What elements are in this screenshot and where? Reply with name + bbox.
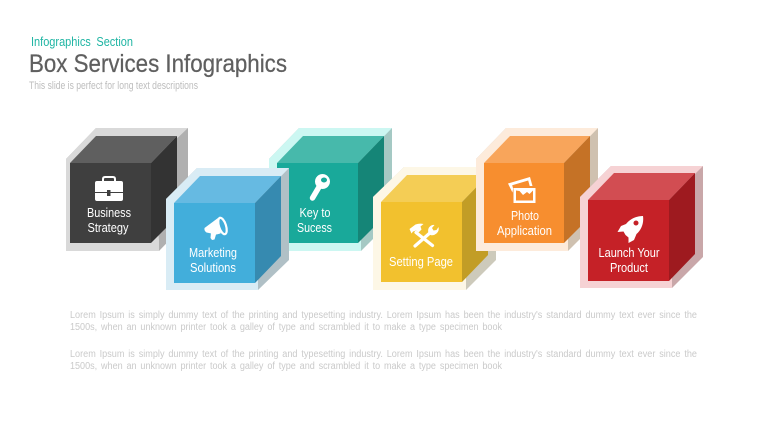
label: Key to Sucess xyxy=(297,205,332,235)
icon: photo xyxy=(508,177,536,203)
text block: first paragraph xyxy=(70,310,697,333)
label: Business Strategy xyxy=(87,205,131,235)
box: Marketing Solutions xyxy=(166,168,289,290)
label: Launch Your Product: Launch Your xyxy=(598,245,660,260)
label: Setting Page: Setting Page xyxy=(389,254,453,269)
label: Marketing Solutions: Solutions xyxy=(190,260,236,275)
label: Key to Sucess: Key to xyxy=(300,205,330,220)
label: Photo Application xyxy=(497,208,552,238)
text block: second paragraph: Lorem Ipsum is simply dummy text of the printing and typesetting industry. Lorem Ipsum has been the industry's standard dummy text ever since the xyxy=(70,349,697,360)
text block: second paragraph: 1500s, when an unknown printer took a galley of type and scrambled it to make a type specimen book xyxy=(70,361,503,372)
box: Business Strategy xyxy=(66,128,188,251)
label: Launch Your Product: Product xyxy=(610,260,648,275)
label: Photo Application: Application xyxy=(497,223,552,238)
icon: briefcase xyxy=(95,177,123,201)
section label: Infographics Section xyxy=(31,34,133,49)
box: Setting Page xyxy=(373,167,496,290)
icon: megaphone xyxy=(204,216,228,240)
icon: rocket xyxy=(618,216,643,243)
box: Launch Your Product xyxy=(580,166,703,288)
text block: first paragraph: 1500s, when an unknown printer took a galley of type and scrambled it to make a type specimen book xyxy=(70,322,503,333)
label: Business Strategy: Business xyxy=(87,205,131,220)
label: Photo Application: Photo xyxy=(511,208,539,223)
label: Marketing Solutions: Marketing xyxy=(189,245,237,260)
icon: key xyxy=(312,174,330,198)
label: Marketing Solutions xyxy=(189,245,237,275)
subtitle: This slide is perfect for long text descriptions xyxy=(29,80,198,92)
title: Box Services Infographics xyxy=(29,50,287,78)
label: Key to Sucess: Sucess xyxy=(297,220,332,235)
icon: hammer and wrench xyxy=(410,224,439,246)
label: Business Strategy: Strategy xyxy=(88,220,129,235)
box: Photo Application xyxy=(476,128,598,251)
text block: first paragraph: Lorem Ipsum is simply dummy text of the printing and typesetting industry. Lorem Ipsum has been the industry's standard dummy text ever since the xyxy=(70,310,697,321)
label: Launch Your Product xyxy=(598,245,660,275)
box: Key to Sucess xyxy=(269,128,392,251)
text block: second paragraph xyxy=(70,349,697,372)
